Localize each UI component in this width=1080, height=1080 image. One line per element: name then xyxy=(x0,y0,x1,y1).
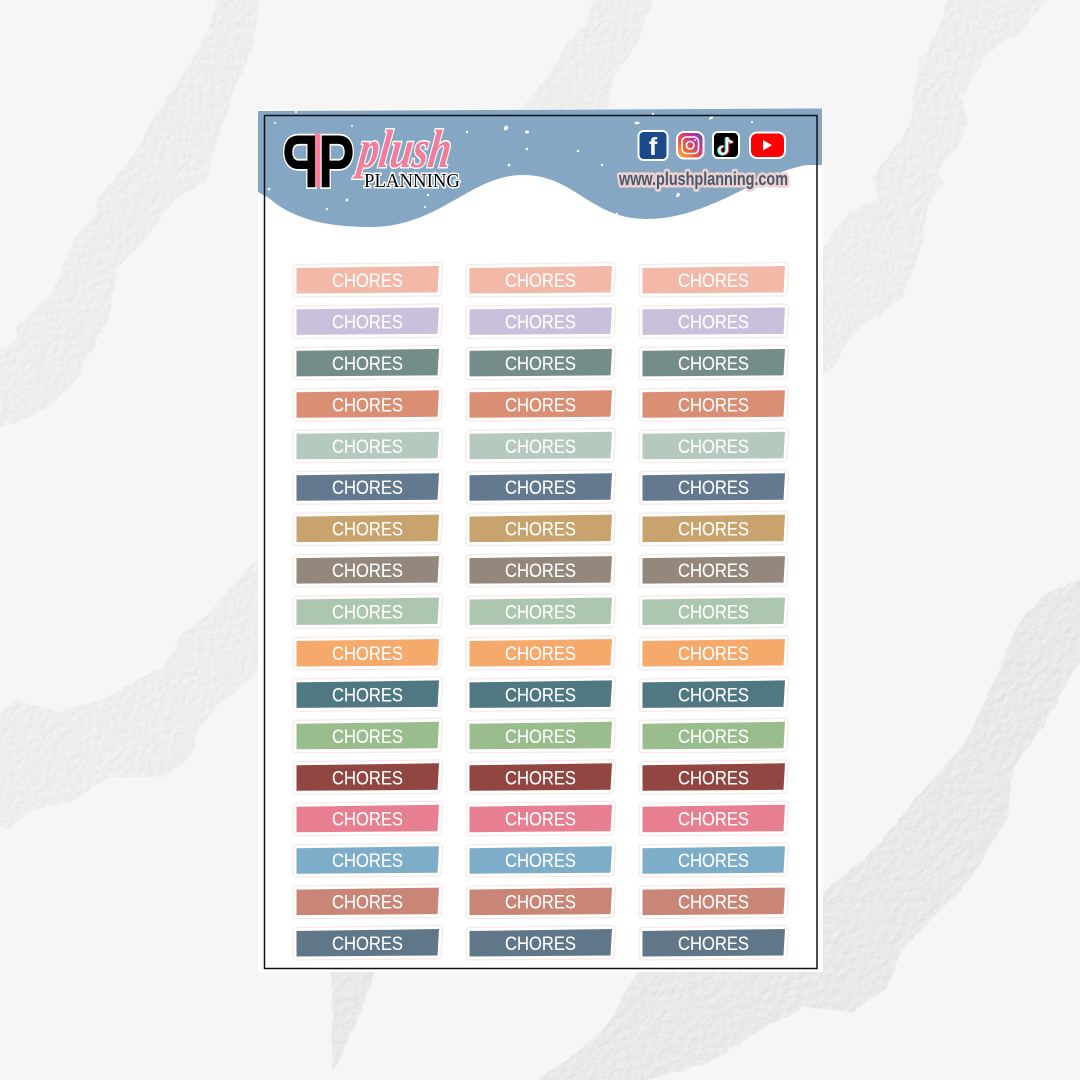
sticker: row 6 right xyxy=(642,473,785,501)
sticker: row 13 right: CHORES xyxy=(678,767,749,789)
sticker: row 7 left: CHORES xyxy=(332,519,403,541)
sticker: row 15 right: CHORES xyxy=(678,850,749,872)
sticker: row 7 middle xyxy=(470,515,612,542)
sticker: row 1 left xyxy=(296,266,439,294)
sticker: row 17 right: CHORES xyxy=(678,933,749,955)
sticker: row 16 left xyxy=(296,888,439,915)
sticker: row 4 middle xyxy=(470,390,612,418)
sticker: row 11 right xyxy=(642,680,785,708)
sticker row 14 xyxy=(296,805,785,832)
sticker row 7 xyxy=(296,515,785,542)
sticker: row 3 right: CHORES xyxy=(678,353,749,375)
sticker: row 3 left: CHORES xyxy=(332,353,403,375)
sticker: row 1 middle: CHORES xyxy=(505,270,576,292)
sticker: row 12 middle: CHORES xyxy=(505,726,576,748)
sticker: row 2 left xyxy=(296,307,439,335)
sticker: row 9 middle: CHORES xyxy=(505,602,576,624)
sticker: row 10 left: CHORES xyxy=(332,643,403,665)
sticker: row 3 right xyxy=(642,349,785,376)
logo word: PLANNING: PLANNING xyxy=(364,170,460,192)
sticker: row 9 middle xyxy=(470,598,612,625)
sticker: row 17 left: CHORES xyxy=(332,933,403,955)
sticker: row 17 right xyxy=(642,929,785,956)
sticker: row 5 right xyxy=(642,432,785,459)
sticker: row 17 middle xyxy=(470,929,612,956)
torn paper strips: bottom xyxy=(332,577,1080,1080)
sticker: row 5 left xyxy=(296,432,439,459)
sticker: row 4 left xyxy=(296,390,439,418)
sheet border xyxy=(264,116,817,968)
sticker: row 4 right xyxy=(642,390,785,418)
sticker: row 2 left: CHORES xyxy=(332,311,403,333)
sticker: row 12 left xyxy=(296,722,439,749)
sticker row 10 xyxy=(296,639,785,666)
sticker: row 4 left: CHORES xyxy=(332,394,403,416)
torn strip: bottom right xyxy=(528,577,1080,1080)
sticker: row 15 middle: CHORES xyxy=(505,850,576,872)
sticker row 1 xyxy=(296,266,785,294)
blue header wave xyxy=(258,108,822,227)
sticker row 11 xyxy=(296,680,785,708)
sticker: row 1 right: CHORES xyxy=(678,270,749,292)
sticker: row 7 middle: CHORES xyxy=(505,519,576,541)
sticker: row 4 right: CHORES xyxy=(678,394,749,416)
sticker row 17 xyxy=(296,929,785,956)
sticker: row 6 left: CHORES xyxy=(332,477,403,499)
sticker: row 15 left: CHORES xyxy=(332,850,403,872)
sticker: row 10 right xyxy=(642,639,785,666)
sticker: row 10 middle xyxy=(470,639,612,666)
sticker: row 11 left xyxy=(296,680,439,708)
sticker: row 13 middle xyxy=(470,763,612,791)
sticker: row 12 left: CHORES xyxy=(332,726,403,748)
sticker: row 8 middle: CHORES xyxy=(505,560,576,582)
sticker: row 5 right: CHORES xyxy=(678,436,749,458)
sticker: row 16 right: CHORES xyxy=(678,892,749,914)
sticker: row 14 middle xyxy=(470,805,612,832)
sticker: row 15 middle xyxy=(470,846,612,874)
sticker: row 14 right xyxy=(642,805,785,832)
sticker: row 14 left: CHORES xyxy=(332,809,403,831)
torn strip: top middle xyxy=(518,0,655,112)
sticker row 8 xyxy=(296,556,785,584)
sticker row 4 xyxy=(296,390,785,418)
sticker row 9 xyxy=(296,598,785,625)
sticker: row 10 middle: CHORES xyxy=(505,643,576,665)
sticker: row 6 left xyxy=(296,473,439,501)
logo: Plush Planning xyxy=(282,119,460,203)
sticker: row 13 left: CHORES xyxy=(332,767,403,789)
sticker sheet xyxy=(258,109,823,972)
sticker: row 3 middle xyxy=(470,349,612,376)
sticker row 15 xyxy=(296,846,785,874)
icon: instagram xyxy=(677,132,704,158)
logo mark: mirrored P: P xyxy=(282,120,319,203)
sticker: row 13 right xyxy=(642,763,785,791)
snow specks xyxy=(268,111,753,215)
sticker row 13 xyxy=(296,763,785,791)
sticker: row 11 middle: CHORES xyxy=(505,684,576,706)
sticker: row 4 middle: CHORES xyxy=(505,394,576,416)
icon: facebook: f xyxy=(649,133,658,161)
sticker: row 13 left xyxy=(296,763,439,791)
sticker: row 16 left: CHORES xyxy=(332,892,403,914)
torn strip: top left xyxy=(0,0,260,430)
sticker: row 11 middle xyxy=(470,680,612,708)
icon: youtube xyxy=(750,132,785,158)
sticker: row 11 left: CHORES xyxy=(332,684,403,706)
sticker: row 1 left: CHORES xyxy=(332,270,403,292)
sticker: row 2 middle: CHORES xyxy=(505,311,576,333)
torn strip: top right xyxy=(815,0,1050,383)
sticker: row 11 right: CHORES xyxy=(678,684,749,706)
sticker: row 5 middle: CHORES xyxy=(505,436,576,458)
sticker: row 15 right xyxy=(642,846,785,874)
sticker: row 6 right: CHORES xyxy=(678,477,749,499)
logo mark: P: P xyxy=(318,120,355,203)
sticker: row 8 left: CHORES xyxy=(332,560,403,582)
icon: facebook xyxy=(638,131,668,161)
sticker: row 16 middle: CHORES xyxy=(505,892,576,914)
sticker: row 6 middle xyxy=(470,473,612,501)
sticker row 6 xyxy=(296,473,785,501)
sticker: row 8 right xyxy=(642,556,785,584)
sticker: row 8 middle xyxy=(470,556,612,584)
sticker: row 14 middle: CHORES xyxy=(505,809,576,831)
sticker: row 9 right: CHORES xyxy=(678,602,749,624)
sticker: row 10 left xyxy=(296,639,439,666)
sticker: row 8 left xyxy=(296,556,439,584)
sticker: row 9 left xyxy=(296,598,439,625)
social icons xyxy=(638,131,785,161)
sticker: row 5 middle xyxy=(470,432,612,459)
logo mark: pink bar xyxy=(315,133,320,187)
sticker: row 3 middle: CHORES xyxy=(505,353,576,375)
sticker: row 7 right: CHORES xyxy=(678,519,749,541)
website address: www.plushplanning.com xyxy=(618,169,788,189)
sticker: row 7 left xyxy=(296,515,439,542)
sticker: row 12 right: CHORES xyxy=(678,726,749,748)
sticker: row 10 right: CHORES xyxy=(678,643,749,665)
sticker: row 2 middle xyxy=(470,307,612,335)
sticker row 3 xyxy=(296,349,785,376)
torn strip: bottom middle xyxy=(332,966,378,1073)
sticker: row 14 right: CHORES xyxy=(678,809,749,831)
sticker: row 16 right xyxy=(642,888,785,915)
sticker row 2 xyxy=(296,307,785,335)
sticker: row 8 right: CHORES xyxy=(678,560,749,582)
sticker: row 13 middle: CHORES xyxy=(505,767,576,789)
sticker: row 3 left xyxy=(296,349,439,376)
sticker: row 1 right xyxy=(642,266,785,294)
sticker: row 14 left xyxy=(296,805,439,832)
logo word: plush: plush xyxy=(352,119,456,179)
icon: tiktok xyxy=(713,132,739,158)
sticker: row 1 middle xyxy=(470,266,612,294)
sticker grid xyxy=(296,266,785,956)
sticker: row 16 middle xyxy=(470,888,612,915)
sticker row 5 xyxy=(296,432,785,459)
sticker: row 2 right: CHORES xyxy=(678,311,749,333)
sticker row 12 xyxy=(296,722,785,749)
sticker: row 12 right xyxy=(642,722,785,749)
sticker: row 12 middle xyxy=(470,722,612,749)
sticker: row 9 left: CHORES xyxy=(332,602,403,624)
sticker: row 15 left xyxy=(296,846,439,874)
sticker: row 7 right xyxy=(642,515,785,542)
sticker: row 5 left: CHORES xyxy=(332,436,403,458)
sticker: row 6 middle: CHORES xyxy=(505,477,576,499)
sticker: row 17 left xyxy=(296,929,439,956)
sticker: row 9 right xyxy=(642,598,785,625)
torn paper strips: upper and left xyxy=(0,0,1050,828)
torn strip: left middle xyxy=(0,553,262,828)
sticker: row 17 middle: CHORES xyxy=(505,933,576,955)
sticker: row 2 right xyxy=(642,307,785,335)
sticker row 16 xyxy=(296,888,785,915)
